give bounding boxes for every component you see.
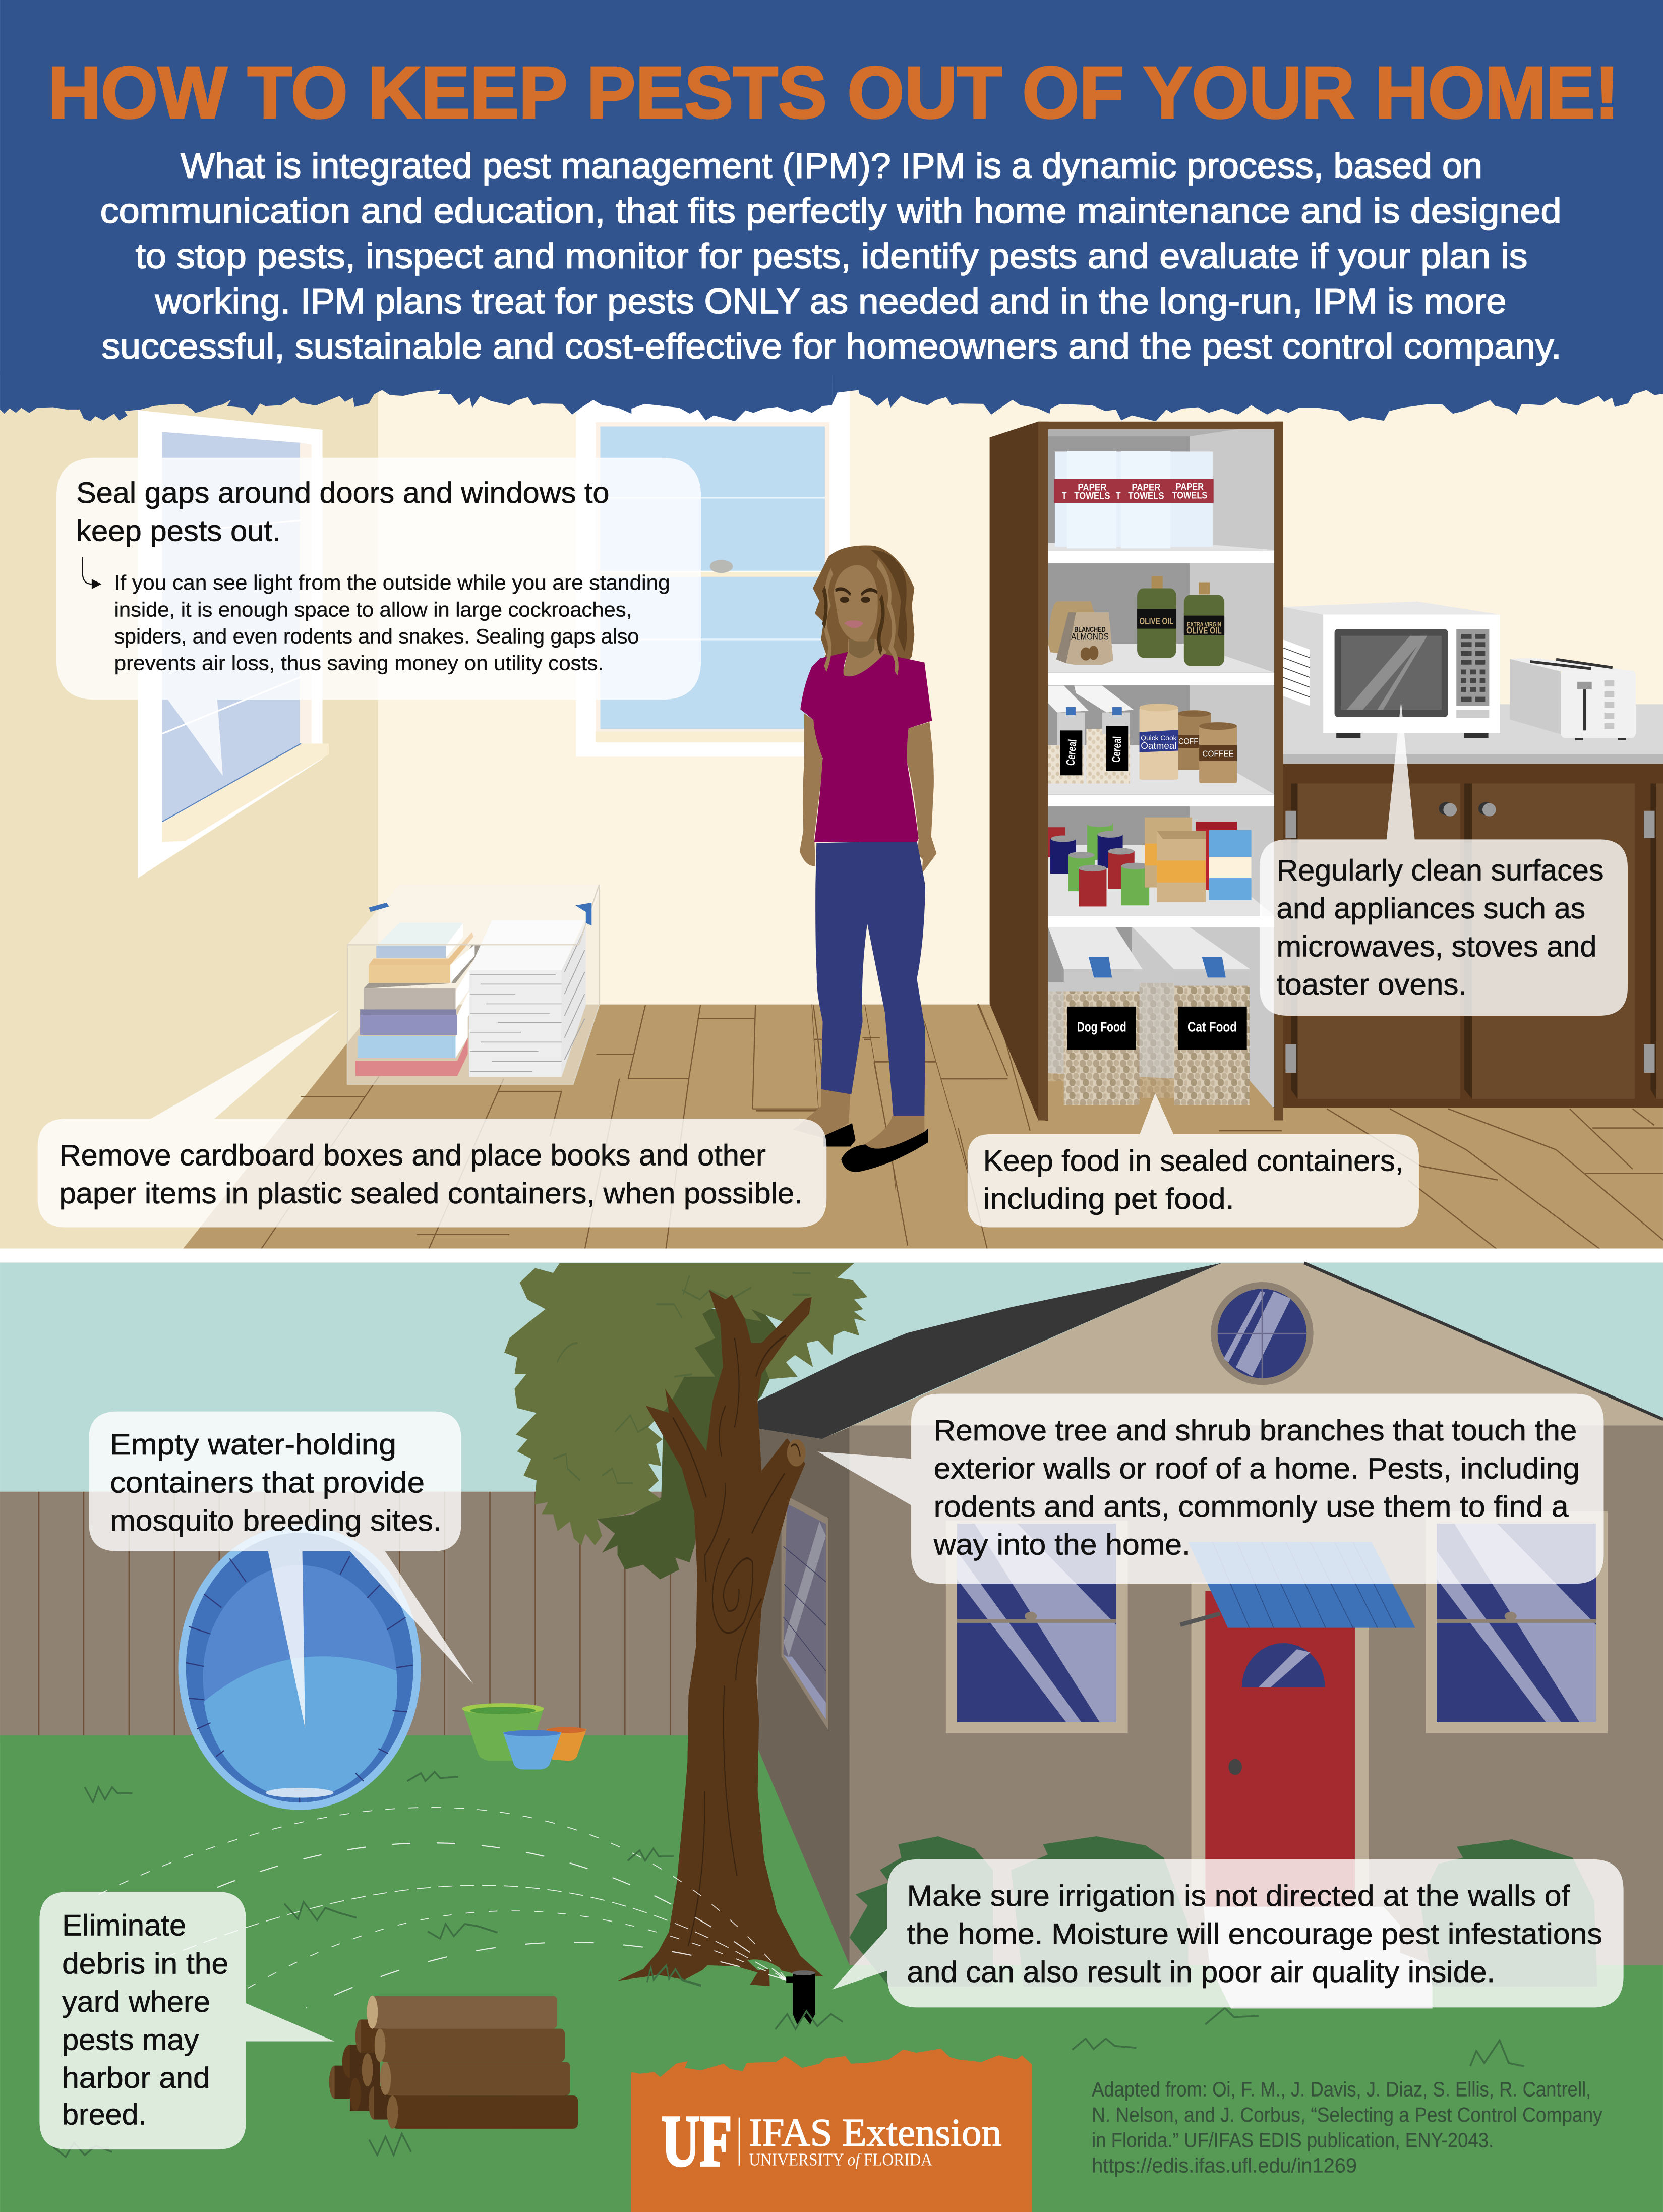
callout: yard debris: pests may — [62, 2023, 199, 2056]
callout: seal gaps: inside, it is enough space to allow in large cockroaches, — [114, 598, 632, 621]
light foliage — [504, 1263, 867, 1546]
paper towels: TOWELS — [1074, 490, 1110, 501]
callout: clean surfaces: Regularly clean surfaces — [1277, 854, 1603, 887]
pantry interior — [1038, 422, 1283, 1121]
left window — [138, 410, 329, 878]
branch stump — [787, 1439, 806, 1467]
oatmeal and coffee — [1140, 704, 1237, 783]
callout: tree branches: Remove tree and shrub branches that touch the — [934, 1414, 1577, 1447]
intro paragraph: What is integrated pest management (IPM)? IPM is a dynamic process, based on — [181, 146, 1482, 185]
callout: yard debris: Eliminate — [62, 1909, 186, 1942]
callout: clean surfaces: microwaves, stoves and — [1277, 930, 1596, 963]
callout: yard debris: breed. — [62, 2099, 147, 2131]
shrubs — [850, 1836, 1597, 1987]
callout: water containers: Empty water-holding — [110, 1428, 396, 1461]
grass tufts — [52, 1772, 843, 2157]
callout: seal gaps: If you can see light from the outside while you are standing — [114, 571, 670, 594]
callout: tree branches: way into the home. — [933, 1529, 1191, 1561]
oatmeal and coffee: Quick Cook — [1141, 734, 1177, 742]
pantry door side — [990, 422, 1048, 1121]
oatmeal and coffee: COFFEE — [1202, 749, 1234, 759]
callout: cardboard boxes: paper items in plastic sealed containers, when possible. — [60, 1177, 803, 1210]
house — [758, 1263, 1663, 2009]
intro paragraph: communication and education, that fits perfectly with home maintenance and is designed — [100, 191, 1562, 230]
callout: clean surfaces: toaster ovens. — [1277, 968, 1467, 1001]
almonds bags: BLANCHED — [1074, 625, 1106, 633]
grass over tree base — [747, 1959, 787, 1980]
wooden floor — [182, 1004, 1663, 1250]
paper towels: PAPER — [1132, 482, 1161, 493]
house front wall — [850, 1425, 1663, 1965]
olive oil bottles — [1137, 576, 1224, 666]
wading pool — [179, 1526, 421, 1810]
logo IFAS Extension: IFAS Extension — [749, 2111, 1001, 2155]
plastic container with books and paper — [347, 885, 602, 1084]
callout: yard debris — [39, 1892, 335, 2149]
logo University of Florida: UNIVERSITY of FLORIDA — [749, 2150, 932, 2170]
kitchen counter and appliances — [1283, 601, 1663, 1108]
paper towels: T — [1062, 490, 1067, 501]
canned food — [1048, 821, 1149, 906]
header banner — [0, 0, 1663, 421]
callout: yard debris: yard where — [62, 1986, 210, 2018]
oatmeal and coffee: COFFI — [1178, 737, 1200, 746]
back wall — [0, 353, 1663, 1256]
paper towels: T — [1116, 490, 1121, 501]
olive oil bottles: EXTRA VIRGIN — [1187, 620, 1221, 628]
panel: outdoor yard scene — [0, 1262, 1663, 2212]
callout: yard debris: harbor and — [62, 2062, 210, 2094]
footer logo panel — [631, 2049, 1032, 2212]
panel: indoor room scene — [0, 353, 1663, 1256]
callout: food containers: including pet food. — [983, 1183, 1234, 1215]
front right window — [1426, 1511, 1608, 1733]
base cabinets — [1283, 763, 1663, 1108]
oatmeal and coffee: Oatmeal — [1141, 741, 1177, 751]
pantry frame — [1038, 422, 1283, 1120]
microwave — [1283, 601, 1500, 738]
callout: seal gaps: keep pests out. — [76, 515, 281, 548]
callout: seal gaps: Seal gaps around doors and windows to — [76, 477, 609, 509]
cereal containers: Cereal — [1110, 736, 1124, 763]
lawn — [0, 1735, 1663, 2212]
callout: water containers — [89, 1412, 473, 1728]
toaster — [1510, 658, 1636, 740]
left wall — [0, 353, 378, 1250]
callout: seal gaps — [56, 458, 701, 776]
title: HOW TO KEEP PESTS OUT OF YOUR HOME! — [48, 51, 1619, 134]
intro paragraph: successful, sustainable and cost-effective for homeowners and the pest control company. — [101, 326, 1562, 366]
bark lines — [673, 1335, 800, 1946]
callout: irrigation: the home. Moisture will encourage pest infestations — [907, 1918, 1602, 1951]
callout: cardboard boxes: Remove cardboard boxes and place books and other — [60, 1139, 766, 1172]
callout: seal gaps: prevents air loss, thus saving money on utility costs. — [114, 652, 604, 675]
counter top — [1283, 704, 1663, 764]
callout: irrigation: Make sure irrigation is not directed at the walls of — [907, 1880, 1570, 1912]
callout: clean surfaces: and appliances such as — [1277, 892, 1585, 925]
reference citation — [1092, 2078, 1602, 2177]
paper towels: TOWELS — [1172, 490, 1207, 501]
almonds bags — [1048, 601, 1113, 665]
olive oil bottles: OLIVE OIL — [1140, 616, 1173, 626]
house side wall — [758, 1427, 850, 1965]
sprinkler head — [786, 1970, 815, 2024]
callout: seal gaps: spiders, and even rodents and snakes. Sealing gaps also — [114, 625, 639, 648]
intro paragraph — [100, 146, 1562, 366]
pet food containers: Dog Food — [1077, 1020, 1126, 1035]
intro paragraph: to stop pests, inspect and monitor for pests, identify pests and evaluate if your plan is — [136, 236, 1527, 275]
more grass tufts — [1072, 2008, 1524, 2066]
separator — [0, 1249, 1663, 1264]
front left window — [946, 1521, 1128, 1733]
boxed food — [1145, 818, 1252, 902]
logo divider — [739, 2118, 740, 2166]
front door — [1191, 1582, 1369, 1907]
icon: arrow — [83, 557, 101, 589]
blue torn banner — [0, 0, 1663, 421]
reference citation: https://edis.ifas.ufl.edu/in1269 — [1092, 2154, 1357, 2177]
gable — [822, 1263, 1663, 1439]
callout: cardboard boxes — [38, 1010, 826, 1228]
callout: water containers: mosquito breeding sites. — [110, 1504, 442, 1537]
intro paragraph: working. IPM plans treat for pests ONLY as needed and in the long-run, IPM is more — [155, 281, 1506, 321]
callout: clean surfaces — [1260, 701, 1628, 1016]
reference citation: in Florida.” UF/IFAS EDIS publication, ENY-2043. — [1092, 2128, 1494, 2151]
woman standing — [793, 545, 936, 1172]
trunk — [618, 1290, 823, 1986]
callout: food containers: Keep food in sealed containers, — [983, 1145, 1403, 1178]
foliage tufts — [553, 1273, 810, 1483]
water buckets — [462, 1703, 586, 1769]
wooden fence — [0, 1492, 765, 1736]
roof — [758, 1263, 1663, 1439]
cereal containers: Cereal — [1064, 739, 1079, 767]
reference citation: N. Nelson, and J. Corbus, “Selecting a Pest Control Company — [1092, 2103, 1602, 2126]
tree — [504, 1263, 867, 1986]
yard objects — [52, 1526, 843, 2157]
steps — [1204, 1907, 1433, 2009]
pet food containers — [1048, 927, 1251, 1105]
callout: food containers — [968, 1093, 1419, 1228]
callout: tree branches — [818, 1394, 1603, 1584]
callout: tree branches: rodents and ants, commonly use them to find a — [934, 1490, 1569, 1523]
almonds bags: ALMONDS — [1071, 631, 1109, 642]
callout: tree branches: exterior walls or roof of a home. Pests, including — [934, 1452, 1580, 1485]
pet food containers: Cat Food — [1187, 1020, 1237, 1035]
sprinkler water — [98, 1808, 787, 2008]
back window — [576, 382, 850, 756]
paper towels — [1054, 451, 1214, 548]
paper towels: PAPER — [1176, 481, 1204, 492]
reference citation: Adapted from: Oi, F. M., J. Davis, J. Diaz, S. Ellis, R. Cantrell, — [1092, 2078, 1591, 2101]
callout: yard debris: debris in the — [62, 1947, 228, 1980]
orange torn panel — [631, 2049, 1032, 2212]
cereal containers — [1048, 685, 1134, 784]
paper towels: TOWELS — [1128, 490, 1164, 501]
sky — [0, 1262, 1663, 1742]
side window — [782, 1497, 828, 1730]
callout: irrigation — [832, 1859, 1624, 2007]
logo UF: UF — [662, 2101, 732, 2182]
log pile — [329, 1996, 578, 2129]
callout: water containers: containers that provide — [110, 1466, 425, 1499]
dark foliage — [597, 1309, 787, 1580]
awning — [1180, 1542, 1415, 1628]
paper towels: PAPER — [1078, 482, 1107, 493]
pantry cabinet with food — [990, 422, 1283, 1121]
callout: irrigation: and can also result in poor air quality inside. — [907, 1956, 1495, 1989]
round attic window — [1211, 1282, 1314, 1385]
grass tuft at tree base — [647, 1965, 701, 1986]
olive oil bottles: OLIVE OIL — [1186, 625, 1222, 636]
